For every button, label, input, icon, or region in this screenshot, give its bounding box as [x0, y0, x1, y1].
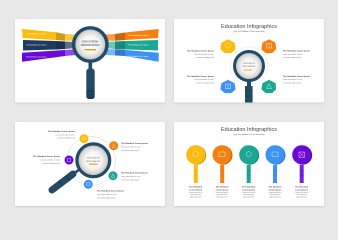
text block: lower right: The Standard Lorem Ipsum — [121, 172, 148, 174]
dashed orbit — [230, 47, 268, 85]
caption: 1 — [189, 186, 203, 198]
text block: top right: The Standard Lorem Ipsum — [283, 50, 310, 52]
caption: 4: amet consectetur — [270, 193, 281, 196]
caption: 2: Lorem Ipsum — [216, 189, 228, 191]
lens accent bar — [244, 70, 252, 71]
caption: 3: The Standard — [242, 186, 256, 188]
caption: 2: adipiscing elit sed — [217, 196, 228, 198]
text block: top left: consectetur adipiscing elit — [196, 56, 215, 59]
text block: upper right: consectetur adipiscing elit — [121, 149, 140, 152]
caption: 2 — [215, 186, 229, 198]
text block: bottom right: The Standard Lorem Ipsum — [283, 75, 310, 78]
lens text: EDUCATION — [244, 62, 255, 65]
caption: 5 — [295, 186, 309, 198]
text block: bottom left — [187, 75, 215, 84]
magnifier: lens — [74, 28, 107, 61]
text block: top left: Lorem ipsum dolor sit amet, — [194, 53, 215, 56]
text block: top right: consectetur adipiscing elit — [283, 56, 302, 59]
caption: 3: adipiscing elit sed — [243, 196, 254, 198]
text block: upper right — [121, 142, 148, 152]
text block: left — [33, 155, 61, 165]
caption: 4: Lorem ipsum dolor sit — [268, 191, 282, 194]
heading: Education Infographics — [221, 127, 277, 133]
text block: left: The Standard Lorem Ipsum — [33, 155, 60, 158]
caption: 3: Lorem ipsum dolor sit — [242, 191, 256, 194]
caption: 5: Lorem Ipsum — [295, 189, 308, 191]
caption: 1: The Standard — [189, 186, 203, 188]
lens accent bar — [84, 49, 96, 50]
text block: bottom right: Lorem ipsum dolor sit amet, — [283, 78, 303, 81]
magnifier: teal — [239, 145, 259, 183]
lens — [77, 144, 110, 177]
lens title: EDUCATION — [82, 39, 98, 43]
text block: lower right — [121, 172, 148, 182]
lens — [234, 52, 264, 80]
ribbon: teal: The Standard Lorem Ipsum — [128, 44, 149, 47]
panel: magnifier with ribbons — [15, 19, 165, 102]
text block: top right: Lorem ipsum dolor sit amet, — [283, 53, 303, 56]
caption: 2: The Standard — [216, 186, 229, 188]
ribbon: orange: The Standard Lorem Ipsum — [128, 34, 149, 37]
text block: upper right: The Standard Lorem Ipsum — [121, 142, 148, 145]
text block: upper right: Lorem ipsum dolor sit amet, — [121, 146, 141, 148]
ribbon: navy — [23, 40, 76, 50]
subheading: Type The Subtitle Of Your Great Here — [233, 30, 265, 33]
ribbon: purple: The Standard Lorem Ipsum — [26, 56, 47, 58]
ribbon: blue — [105, 49, 159, 62]
lens accent bar — [89, 164, 98, 165]
caption: 4: Lorem Ipsum — [269, 189, 281, 191]
text block: bottom left: The Standard Lorem Ipsum — [187, 75, 214, 78]
lens text: INFOGRAPHIC — [242, 65, 256, 68]
text block: top left: The Standard Lorem Ipsum — [187, 50, 214, 52]
ribbon: blue: The Standard Lorem Ipsum — [128, 55, 149, 58]
text block: top left — [187, 50, 215, 59]
magnifier: orange — [212, 145, 232, 183]
ribbon: yellow — [22, 29, 76, 41]
text block: left: Lorem ipsum dolor sit amet, — [40, 158, 61, 162]
caption: 3: Lorem Ipsum — [242, 189, 255, 191]
panel: five coloured magnifiers — [174, 122, 324, 206]
caption: 1: Lorem ipsum dolor sit — [189, 191, 203, 194]
heading: Education Infographics — [221, 24, 277, 30]
panel: tilted magnifier with orbit — [15, 122, 165, 206]
magnifier: yellow — [186, 145, 206, 183]
text block: bottom: The Standard Lorem Ipsum — [97, 190, 124, 192]
node: yellow — [80, 134, 88, 143]
ribbon: purple — [22, 49, 76, 62]
handle — [245, 80, 253, 102]
caption: 1: amet consectetur — [190, 193, 202, 196]
subheading: Type The Subtitle Of Your Great Here — [233, 133, 265, 136]
lens text — [86, 156, 101, 163]
ribbon: navy: The Standard Lorem Ipsum — [26, 44, 47, 47]
text block: bottom right: consectetur adipiscing elit — [283, 82, 302, 84]
lens subtitle: INFOGRAPHIC — [81, 43, 100, 47]
node: orange — [109, 141, 118, 150]
caption: 5: The Standard — [295, 186, 309, 188]
text block: top: Lorem ipsum dolor sit amet, — [55, 134, 76, 136]
handle — [52, 169, 80, 190]
caption: 5: amet consectetur — [296, 193, 308, 196]
text block: bottom left: Lorem ipsum dolor sit amet, — [194, 78, 215, 81]
text block: bottom — [97, 190, 124, 200]
text block: top right — [283, 50, 310, 59]
badge: blue — [221, 80, 235, 92]
node: blue — [84, 180, 93, 189]
caption: 2: amet consectetur — [217, 193, 228, 196]
caption: 5: Lorem ipsum dolor sit — [295, 191, 309, 194]
text block: bottom: consectetur adipiscing elit — [97, 196, 116, 200]
caption: 2: Lorem ipsum dolor sit — [215, 191, 229, 194]
caption: 4: adipiscing elit sed — [270, 196, 281, 198]
node: teal — [108, 171, 118, 180]
ribbon: orange — [105, 29, 159, 41]
magnifier: handle — [86, 62, 95, 99]
text block: bottom right — [283, 75, 310, 84]
lens text — [242, 62, 256, 68]
caption: 4 — [268, 186, 282, 198]
ribbon: yellow: The Standard Lorem Ipsum — [26, 32, 47, 36]
text block: lower right: consectetur adipiscing elit — [121, 178, 140, 182]
magnifier: blue — [266, 145, 286, 183]
caption: 4: The Standard — [269, 186, 282, 188]
caption: 1: adipiscing elit sed — [190, 196, 201, 198]
orbit — [66, 136, 116, 186]
caption: 3 — [242, 186, 256, 198]
text block: lower right: Lorem ipsum dolor sit amet, — [121, 175, 141, 178]
caption: 5: adipiscing elit sed — [296, 196, 307, 198]
ribbon: teal — [105, 40, 158, 50]
text block: top: consectetur adipiscing elit — [57, 136, 76, 140]
badge: teal — [262, 80, 276, 92]
text block: left: consectetur adipiscing elit — [42, 162, 61, 165]
panel: four hexagon badges — [174, 19, 324, 102]
node: purple — [64, 156, 74, 164]
lens text: INFOGRAPHIC — [86, 160, 101, 163]
caption: 1: Lorem Ipsum — [189, 189, 202, 191]
badge: yellow — [221, 40, 235, 52]
magnifier: purple — [292, 145, 312, 183]
caption: 3: amet consectetur — [243, 193, 255, 196]
text block: bottom: Lorem ipsum dolor sit amet, — [97, 193, 117, 196]
badge: orange — [262, 40, 276, 52]
text block: top: The Standard Lorem Ipsum — [48, 130, 75, 133]
text block: top — [48, 130, 76, 140]
lens text: EDUCATION — [87, 156, 100, 160]
text block: bottom left: consectetur adipiscing elit — [196, 82, 215, 84]
